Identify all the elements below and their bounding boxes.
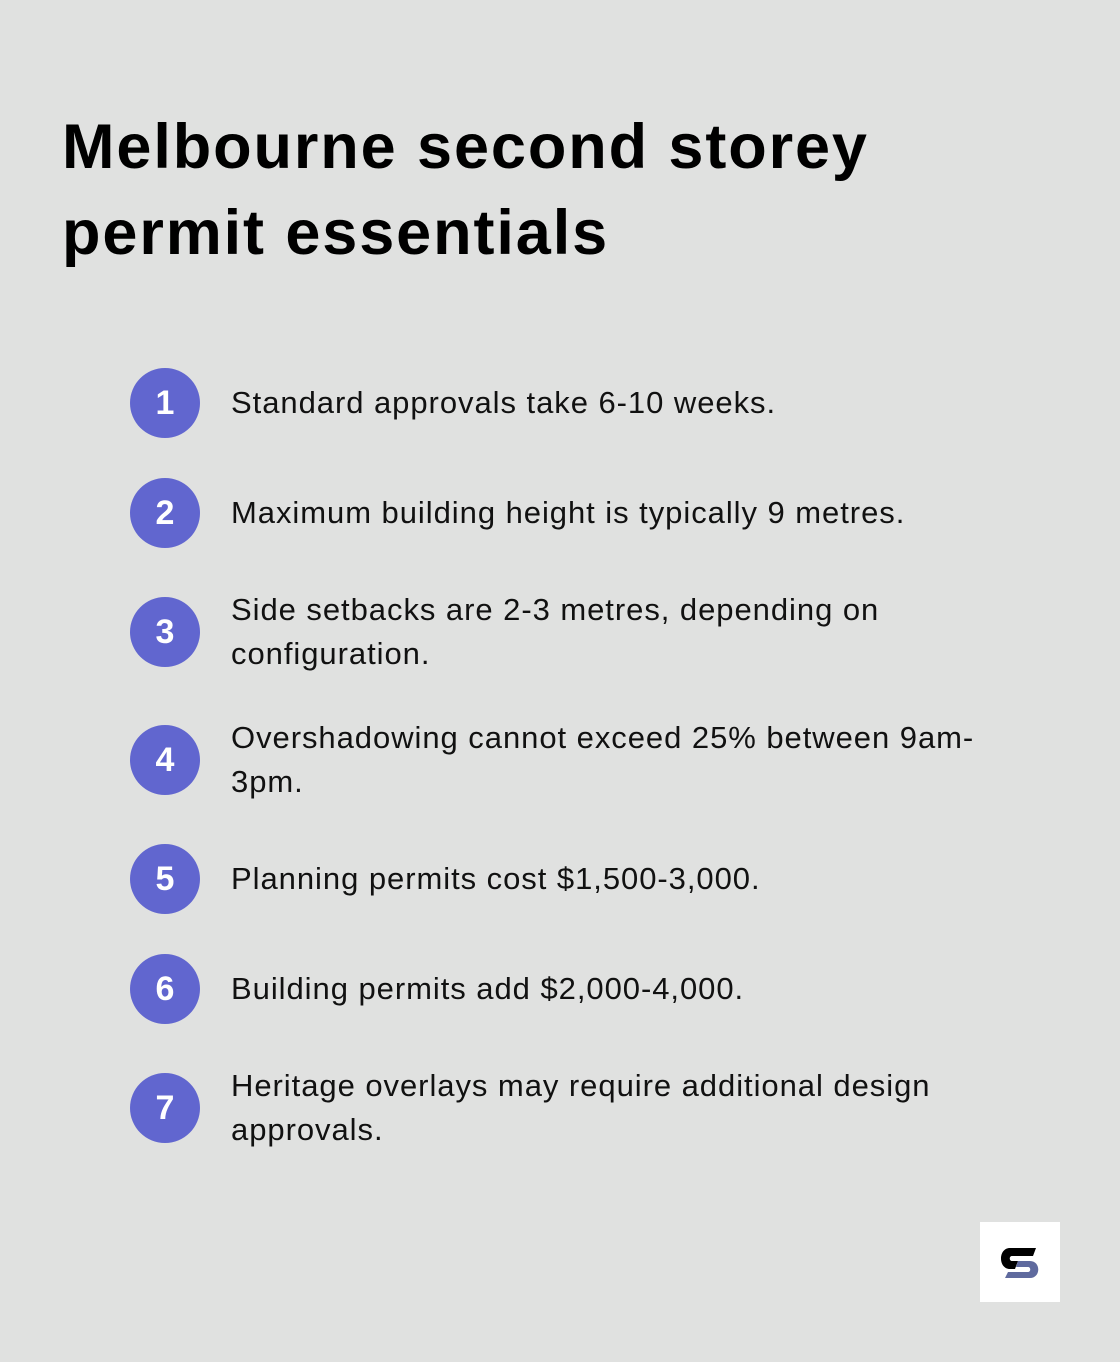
item 6: 6 [156, 970, 174, 1008]
item 1 [130, 368, 776, 438]
item 3: 3 [156, 613, 174, 651]
item 2 [130, 478, 905, 548]
item 4: 4 [156, 741, 174, 779]
item 4: Overshadowing cannot exceed 25% between 9am-3pm. [231, 720, 974, 799]
logo [980, 1222, 1060, 1302]
title: permit essentials [62, 198, 609, 268]
item 2: 2 [156, 494, 174, 532]
item 1: 1 [156, 384, 174, 422]
item 3: Side setbacks are 2-3 metres, depending on configuration. [231, 592, 879, 671]
item 5: Planning permits cost $1,500-3,000. [231, 861, 761, 896]
item 7: Heritage overlays may require additional design approvals. [231, 1068, 930, 1147]
item 5: 5 [156, 860, 174, 898]
item 6 [130, 954, 744, 1024]
title [62, 112, 869, 268]
title: Melbourne second storey [62, 112, 869, 182]
item 6: Building permits add $2,000-4,000. [231, 971, 744, 1006]
item 7: 7 [156, 1089, 174, 1127]
item 5 [130, 844, 761, 914]
item 1: Standard approvals take 6-10 weeks. [231, 385, 776, 420]
item 2: Maximum building height is typically 9 metres. [231, 495, 905, 530]
